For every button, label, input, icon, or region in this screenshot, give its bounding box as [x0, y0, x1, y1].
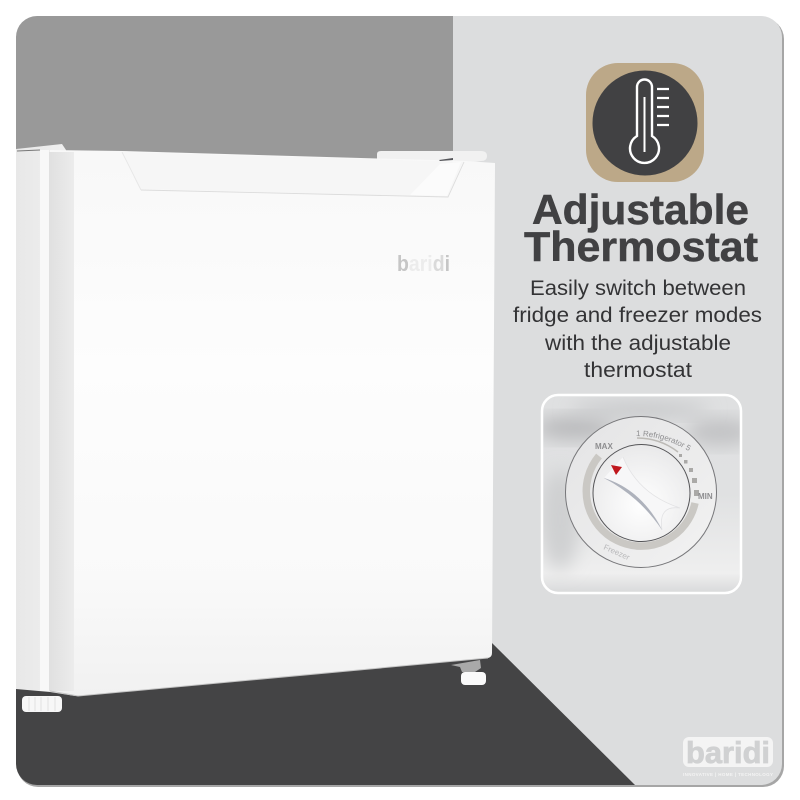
title: Adjustable: [532, 186, 749, 233]
thermostat photo: [540, 394, 742, 594]
door bottom edge: [50, 658, 488, 696]
description: [513, 277, 762, 382]
description: thermostat: [584, 359, 692, 382]
fridge: [16, 144, 495, 712]
description: with the adjustable: [544, 332, 731, 355]
fridge logo: baridi: [397, 251, 450, 276]
dial steps: [679, 454, 699, 496]
door handle recess: [122, 152, 464, 197]
title: [524, 186, 758, 270]
fridge side panel: [16, 144, 75, 696]
dial labels: MIN: [698, 492, 713, 501]
dial labels: [595, 430, 713, 562]
icon: thermometer: [586, 63, 704, 182]
floor: [16, 643, 636, 786]
foot left: [22, 696, 62, 712]
knob grip: [604, 457, 680, 530]
fridge rear hinge: [377, 151, 487, 164]
dial knob: [593, 444, 690, 542]
description: Easily switch between: [530, 277, 746, 300]
refrigerator arc: [637, 438, 678, 452]
fridge door: [50, 150, 495, 696]
dial outer ring: [566, 416, 716, 568]
foot right: [451, 660, 486, 685]
description: fridge and freezer modes: [513, 304, 762, 327]
dial labels: MAX: [595, 442, 613, 451]
baridi logo: INNOVATIVE | HOME | TECHNOLOGY: [683, 772, 773, 777]
red pointer: [611, 465, 622, 475]
title: Thermostat: [524, 223, 758, 270]
dial labels: 1 Refrigerator 5: [636, 430, 691, 450]
baridi logo: baridi: [686, 735, 770, 770]
dial labels: Freezer: [602, 543, 631, 562]
freezer arc: [586, 456, 695, 546]
